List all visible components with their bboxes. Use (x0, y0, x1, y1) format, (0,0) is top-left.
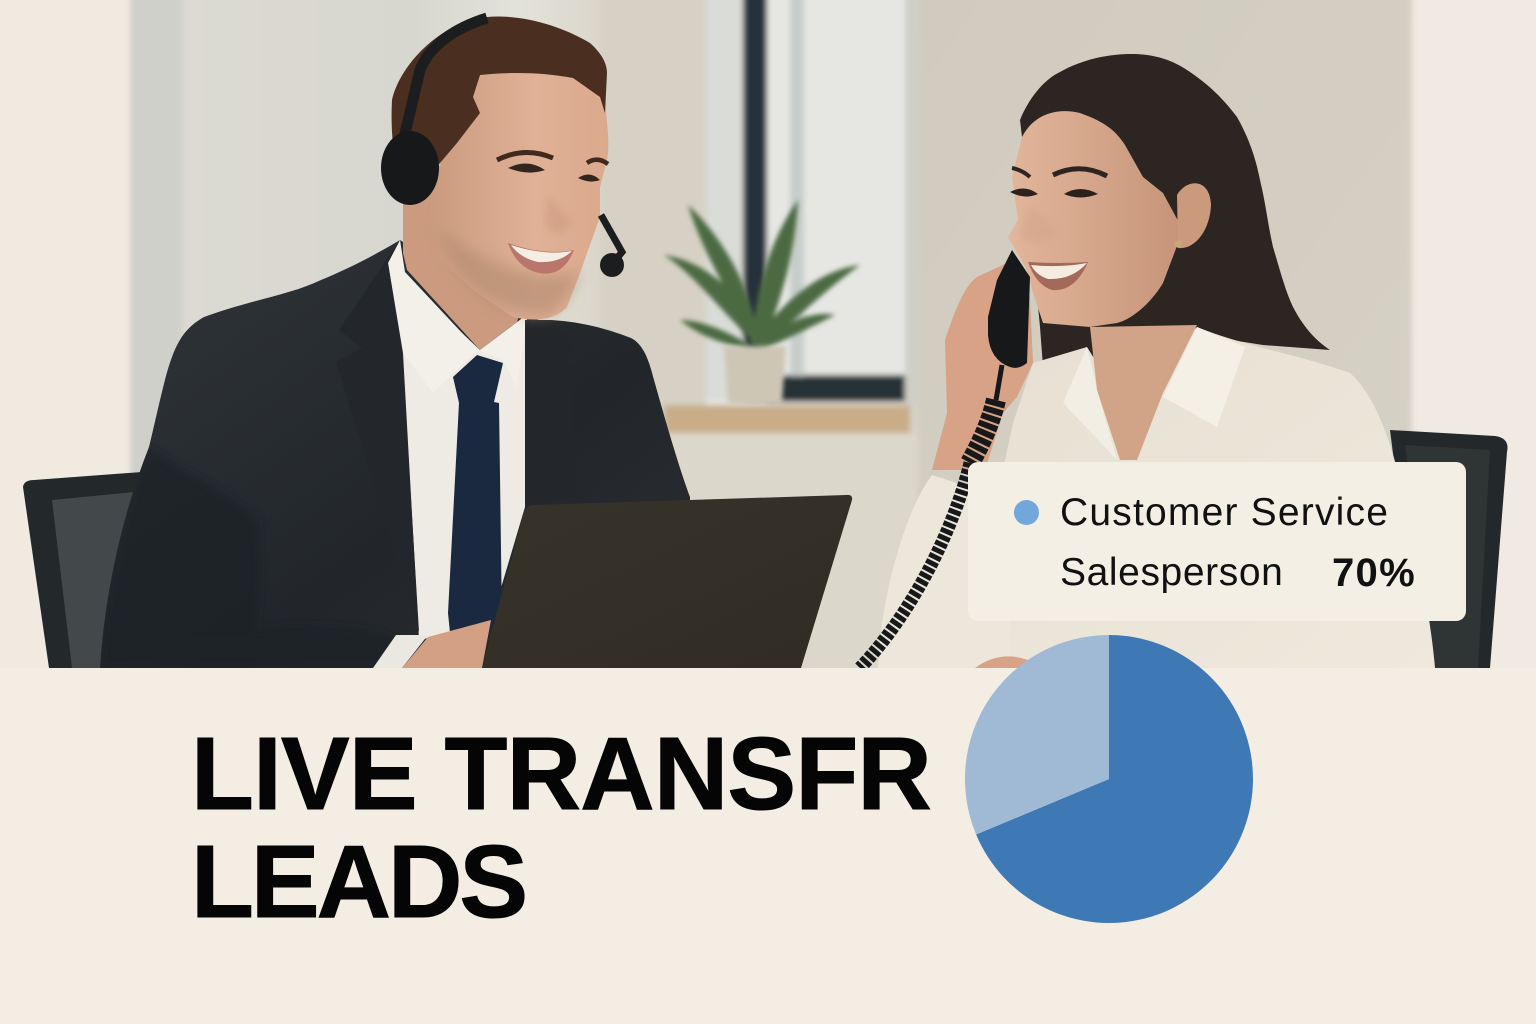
legend dot (1014, 500, 1039, 525)
left lapel (336, 240, 419, 632)
neck (1090, 325, 1197, 460)
neck (403, 190, 530, 350)
ear (1177, 183, 1211, 248)
brows (497, 152, 553, 160)
hair (392, 17, 607, 205)
legend value: 70% (1332, 551, 1416, 595)
chair: woman (1390, 430, 1508, 668)
headset (381, 18, 624, 277)
hand and forearm (932, 263, 1033, 470)
shirt collar (388, 240, 478, 393)
mouth (1028, 262, 1088, 290)
potted plant (664, 200, 860, 404)
blouse collar right (1163, 327, 1245, 427)
photo: two professionals on phone calls in an office (23, 0, 1508, 668)
cuff (373, 635, 428, 668)
mouth (508, 243, 574, 274)
title: LEADS (191, 824, 525, 939)
nose shading (545, 195, 572, 235)
sleeve (878, 475, 1010, 668)
legend label: customer service: Customer Service (1060, 491, 1389, 534)
right lapel (525, 318, 575, 507)
tie (448, 355, 503, 633)
jacket sleeve shading (106, 448, 380, 638)
title (191, 716, 931, 939)
face (1008, 111, 1183, 327)
chair: man (23, 472, 142, 668)
eyes (1010, 188, 1038, 197)
stubble shading (437, 225, 580, 318)
title: LIVE TRANSFR (191, 716, 931, 831)
lower hand (975, 656, 1030, 668)
blouse (960, 327, 1435, 668)
pie slice: 70% (976, 635, 1253, 923)
earring (1174, 240, 1182, 248)
brows (1012, 168, 1030, 177)
office background (0, 0, 1536, 688)
shirt (388, 240, 525, 640)
hair (1020, 54, 1330, 367)
legend card (968, 462, 1466, 621)
hand (402, 620, 491, 668)
man (100, 17, 690, 668)
suit jacket (100, 240, 690, 668)
legend label: salesperson: Salesperson (1060, 551, 1283, 594)
woman (860, 54, 1435, 668)
eyes (508, 163, 545, 173)
blouse collar left (1063, 347, 1117, 460)
coiled cord (860, 365, 1002, 668)
laptop (482, 495, 852, 668)
face (427, 60, 608, 320)
nose shading (1020, 205, 1058, 244)
pie slice: 30% (965, 635, 1109, 834)
phone handset (988, 250, 1030, 368)
